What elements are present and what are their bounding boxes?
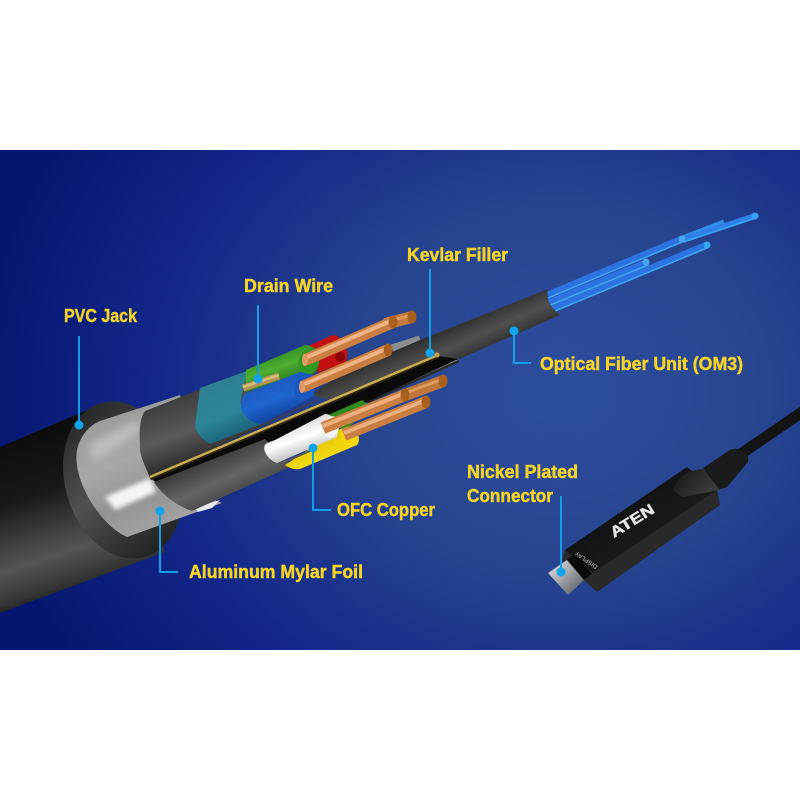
leader: Drain Wire [254,305,262,384]
fiber strands [548,212,758,313]
leader: PVC Jack [74,336,84,430]
foil highlights [88,420,220,512]
copper wire lower right [344,396,430,435]
strands behind sleeve [367,339,458,401]
blue wire [241,370,320,424]
copper wire middle [299,344,392,393]
foil strip behind core [76,395,222,537]
jacket end ring [45,387,201,573]
copper wire back top [385,310,416,324]
black jacket [0,403,165,613]
label: PVC Jack: PVC Jack [64,306,138,326]
leader: OFC Copper [308,444,331,510]
label: Aluminum Mylar Foil: Aluminum Mylar Foil [189,562,363,582]
plug collar [567,554,592,580]
port label: DISPLAY [574,549,599,569]
USB-C connector [548,410,800,595]
label: Drain Wire: Drain Wire [244,276,333,296]
yellow wire [285,426,359,469]
leader: Kevlar Filler [426,269,434,358]
logo: ATEN [607,501,658,541]
connector cap detail [673,469,720,497]
lower core [154,439,292,511]
leader: Optical Fiber Unit [510,326,531,363]
label: Nickel Plated Connector: Nickel Plated [467,462,578,482]
connector housing top [565,467,717,573]
copper wire front top [302,316,398,366]
white wire [264,414,342,464]
optical fiber sleeve [310,289,560,402]
teal shield [195,371,262,444]
connector housing side [562,490,720,592]
label: Kevlar Filler: Kevlar Filler [407,245,508,265]
label: OFC Copper: OFC Copper [337,500,435,520]
black gap under kevlar [150,356,458,495]
strain relief [703,449,748,490]
inner dark core [140,371,345,478]
label: Nickel Plated Connector: Connector [467,486,553,506]
connector cable [735,410,800,458]
label: Optical Fiber Unit: Optical Fiber Unit (OM3) [540,354,743,374]
red wire [308,335,347,373]
kevlar filler [150,352,440,478]
green wire [245,344,323,392]
leader: Nickel Plated Connector [556,496,566,576]
metal plug [548,560,584,595]
label: Nickel Plated Connector [467,462,578,506]
lower green wire [328,400,369,432]
copper wire lower front [323,388,410,428]
blue background panel [0,150,800,650]
leader: Aluminum Mylar Foil [156,506,178,572]
copper wire lower back [400,374,448,397]
drain wire [243,375,279,388]
